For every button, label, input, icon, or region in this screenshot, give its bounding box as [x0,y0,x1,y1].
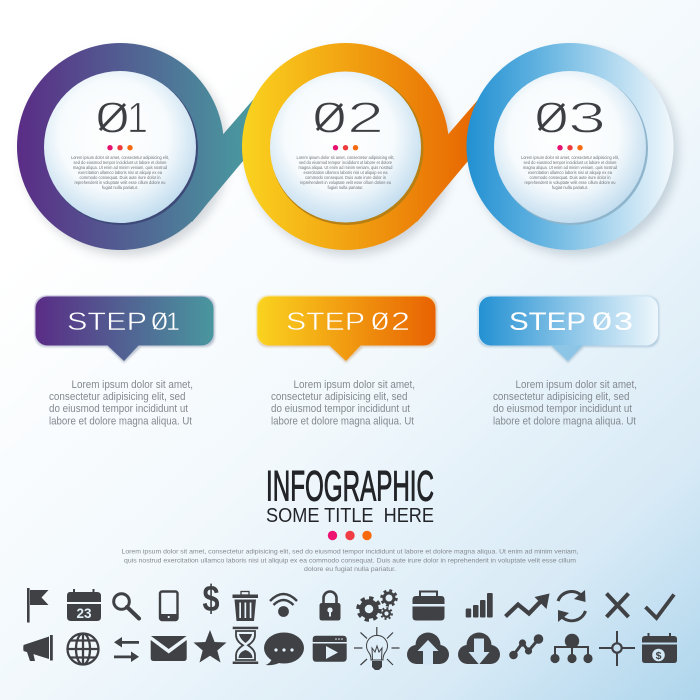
text 03: Lorem ipsum dolor sit amet, consectetur adipisicing elit, [521,155,619,161]
icon: light bulb [354,627,400,670]
text block: step 01: consectetur adipisicing elit, sed [49,391,186,403]
dots 02 [333,145,358,150]
text 01: commodo consequat. Duis aute irure dolor in [80,175,161,181]
icon: cloud download [458,632,500,664]
number 02 [312,94,384,142]
title dots [328,531,372,540]
label: step 01: 1 [166,308,180,336]
text 03: commodo consequat. Duis aute irure dolor in [530,175,611,181]
number 03: 0 [534,94,569,142]
icon: trend arrow [506,594,550,616]
text 01: Lorem ipsum dolor sit amet, consectetur adipisicing elit, [71,155,169,161]
icon: refresh [558,590,586,622]
icon: calendar dollar [642,633,677,663]
title: INFOGRAPHIC [266,462,434,510]
icon set [23,578,677,670]
icon: org chart [550,634,593,663]
icon: line graph [509,634,543,659]
label: step 01: 0 [151,308,168,336]
text block: step 03: labore et dolore magna aliqua. Ut [493,416,636,428]
label: step 01: STEP [67,308,147,336]
panel: circle step 02 [242,43,489,256]
text 02: commodo consequat. Duis aute irure dolor in [305,175,386,181]
number 01: 1 [127,94,148,142]
number 01 [95,94,148,142]
label: step 03: STEP [509,308,586,336]
text block: step 02: do eiusmod tempor incididunt ut [271,403,410,415]
text 02: reprehenderit in voluptate velit esse cillum dolore eu [300,180,391,186]
text 01: fugiat nulla pariatur. [102,185,138,191]
icon: wifi [270,594,297,617]
label: step 01 [34,296,215,363]
icon: lock [320,592,340,620]
text block: step 03: consectetur adipisicing elit, sed [493,391,630,403]
number 02: 2 [347,94,384,142]
number 01: 0 [95,94,130,142]
icon: calendar 23 [67,589,101,621]
text 02: exercitation ullamco laboris nisi ut aliquip ex ea [304,170,388,176]
text 01: exercitation ullamco laboris nisi ut aliquip ex ea [78,170,162,176]
panel: circle step 03 [466,43,678,256]
icon: speech bubble [264,632,304,665]
intro paragraph [122,548,579,573]
number 03: 3 [568,94,606,142]
text block: step 02: consectetur adipisicing elit, sed [271,391,408,403]
icon: crosshair node [599,631,635,666]
text 01: magna aliqua. Ut enim ad minim veniam, quis nostrud [73,165,167,171]
text block: step 03: Lorem ipsum dolor sit amet, [516,379,637,391]
label: step 03: 3 [614,308,633,336]
number 03 [534,94,606,142]
intro paragraph: dolore eu fugiat nulla pariatur. [304,566,396,573]
number 02: 0 [312,94,347,142]
icon: megaphone [23,635,53,661]
icon: calendar 23: 23 [76,606,92,621]
icon: mail [151,636,187,661]
text 03 [521,155,619,191]
intro paragraph: Lorem ipsum dolor sit amet, consectetur adipisicing elit, sed do eiusmod tempor incididunt ut labore et dolore magna aliqua. Ut enim ad minim veniam, [122,548,579,556]
dots 01 [107,145,133,150]
icon: phone [160,592,178,620]
text block: step 01 [49,379,193,428]
text block: step 01: Lorem ipsum dolor sit amet, [72,379,193,391]
icon: transfer arrows [114,637,139,662]
icon: globe [68,634,98,664]
icon: briefcase [412,592,444,620]
text block: step 03: do eiusmod tempor incididunt ut [493,403,632,415]
label: step 02 [256,296,437,363]
icon: cross [606,594,628,617]
text block: step 01: do eiusmod tempor incididunt ut [49,403,188,415]
text 02: fugiat nulla pariatur. [328,185,364,191]
icon: trash [232,592,258,621]
text block: step 02: Lorem ipsum dolor sit amet, [294,379,415,391]
text 02 [296,155,394,191]
icon: cloud upload [407,632,449,664]
text 01: sed do eiusmod tempor incididunt ut labore et dolore [74,160,167,166]
icon: hourglass [233,627,258,664]
subtitle: SOME TITLE HERE [266,504,434,527]
text 03: sed do eiusmod tempor incididunt ut labore et dolore [524,160,617,166]
label: step 02: 0 [371,308,389,336]
icon: video player [313,636,347,662]
label: step 03: 0 [592,308,612,336]
label: step 02: STEP [286,308,365,336]
intro paragraph: quis nostrud exercitation ullamco laboris nisi ut aliquip ex ea commodo consequat. Duis aute irure dolor in reprehenderit in voluptate velit esse cillum [124,558,576,564]
panel: circle step 01 [17,43,264,256]
text 03: exercitation ullamco laboris nisi ut aliquip ex ea [528,170,612,176]
icon: check [646,594,674,618]
connector ribbon 01 [170,94,264,222]
icon: gears [358,590,396,620]
label: step 03 [478,296,659,363]
icon: dollar: $ [202,578,220,619]
icon: star [194,630,226,662]
text 01: reprehenderit in voluptate velit esse cillum dolore eu [74,180,166,186]
icon: flag [27,588,48,622]
text 03: reprehenderit in voluptate velit esse cillum dolore eu [524,180,616,186]
icon: magnifier [114,594,139,618]
text 01 [71,155,169,191]
text 03: magna aliqua. Ut enim ad minim veniam, quis nostrud [523,165,617,171]
text block: step 02 [271,379,415,428]
text 02: Lorem ipsum dolor sit amet, consectetur adipisicing elit, [296,155,394,161]
text block: step 01: labore et dolore magna aliqua. Ut [49,416,192,428]
icon: calendar dollar: $ [656,650,662,662]
text block: step 03 [493,379,637,428]
text 03: fugiat nulla pariatur. [552,185,588,191]
text block: step 02: labore et dolore magna aliqua. Ut [271,416,414,428]
icon: signal bars [466,593,493,618]
text 02: magna aliqua. Ut enim ad minim veniam, quis nostrud [298,165,393,171]
connector ribbon 02 [395,94,489,222]
dots 03 [557,145,583,150]
label: step 02: 2 [391,308,410,336]
text 02: sed do eiusmod tempor incididunt ut labore et dolore [299,160,392,166]
